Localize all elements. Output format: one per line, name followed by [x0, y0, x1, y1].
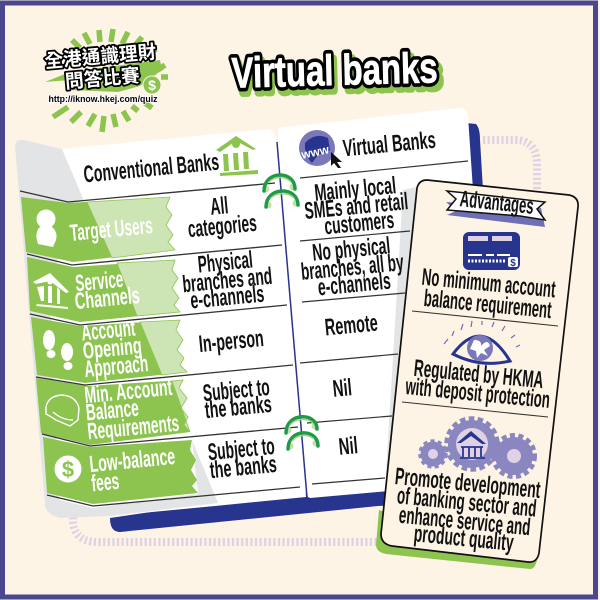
cell: no physical [300, 232, 405, 301]
logo url: http://iknow.hkej.com/quiz [48, 94, 158, 105]
cell: mainly local: customers [323, 207, 395, 240]
label: opening: Opening [82, 332, 143, 364]
label: min account: Min. Account [83, 374, 173, 408]
cell: in-person: In-person [198, 325, 265, 358]
cell: all categories: categories [187, 210, 258, 243]
cell: remote: Remote [324, 310, 379, 342]
cell: mainly local [303, 172, 409, 240]
label: low-balance: Low-balance [88, 443, 176, 477]
icon: cursor [331, 152, 342, 168]
cell: nil: Nil [338, 432, 359, 461]
cell: subject to the banks [207, 433, 278, 484]
icon: bank [216, 136, 258, 176]
cell: subject to the banks [202, 374, 273, 424]
logo coin: $ [148, 77, 156, 93]
icon: bank [33, 273, 69, 309]
heading: virtual banks: Virtual Banks [342, 127, 437, 162]
title: Virtual banks: Virtual banks [233, 49, 442, 103]
text: promote development [394, 463, 542, 557]
label: requirements: Requirements [86, 410, 180, 444]
title: Virtual banks: Virtual banks [231, 44, 438, 98]
cell: subject to the banks: Subject to [207, 433, 276, 466]
label: fees: fees [90, 468, 120, 496]
cell: nil: Nil [332, 374, 353, 403]
cell: subject to the banks: the banks [209, 451, 278, 484]
row: low-balance fees [43, 437, 198, 504]
label: service: Service [74, 266, 124, 296]
cell: no physical: branches, all by [300, 249, 405, 286]
label: account: Account [80, 314, 136, 346]
text: regulated by hkma [404, 355, 551, 414]
cell: subject to the banks: Subject to [202, 374, 271, 407]
cell: physical branches: Physical [197, 246, 254, 279]
book back cover [110, 123, 483, 532]
icon: dollar [54, 456, 82, 482]
cell: physical branches: branches and [181, 263, 273, 298]
icon: credit card [463, 232, 520, 270]
label: approach: Approach [83, 350, 149, 382]
row: service channels [27, 257, 180, 322]
icon: credit card: $ [510, 258, 516, 269]
icon: www globe [299, 130, 342, 168]
label: target users: Target Users [69, 212, 154, 246]
cell: all categories: All [209, 192, 230, 221]
cell: physical branches [181, 246, 273, 315]
cell: no physical: No physical [311, 232, 391, 267]
banner: advantages: Advantages [459, 185, 535, 219]
row: minimum balance [36, 374, 190, 445]
cell: no physical: e-channels [317, 268, 392, 301]
banner: advantages [446, 185, 545, 227]
heading: conventional banks: Conventional Banks [82, 149, 220, 188]
text: no minimum account balance [421, 264, 557, 324]
logo title line 2: 問答比賽 [64, 64, 141, 93]
cell: mainly local: Mainly local [313, 172, 397, 207]
icon: gears with bank [420, 419, 534, 476]
label: balance: Balance [85, 395, 140, 426]
logo: quiz badge [44, 29, 168, 132]
icon: piggy bank [46, 395, 79, 426]
logo title line 1: 全港通識理財 [44, 41, 157, 73]
cell: physical branches: e-channels [189, 281, 265, 315]
cell: all categories [187, 192, 258, 243]
icon: footprints [43, 330, 73, 370]
panel: left page [15, 129, 306, 518]
book spine [277, 142, 307, 497]
panel: advantages [376, 180, 578, 569]
panel: right page [278, 108, 473, 498]
title: Virtual banks: Virtual banks [231, 44, 438, 98]
row: account opening approach [31, 314, 187, 383]
icon: www globe: www [299, 142, 331, 162]
cell: mainly local: SMEs and retail [303, 188, 409, 225]
label: channels: Channels [74, 282, 141, 314]
binder rings [262, 175, 320, 450]
icon: eye [444, 321, 520, 363]
text: promote development: product quality [413, 520, 515, 557]
icon: person [36, 210, 56, 247]
icon: dollar: $ [62, 457, 74, 482]
row: target users [21, 197, 175, 262]
cell: subject to the banks: the banks [204, 391, 273, 424]
